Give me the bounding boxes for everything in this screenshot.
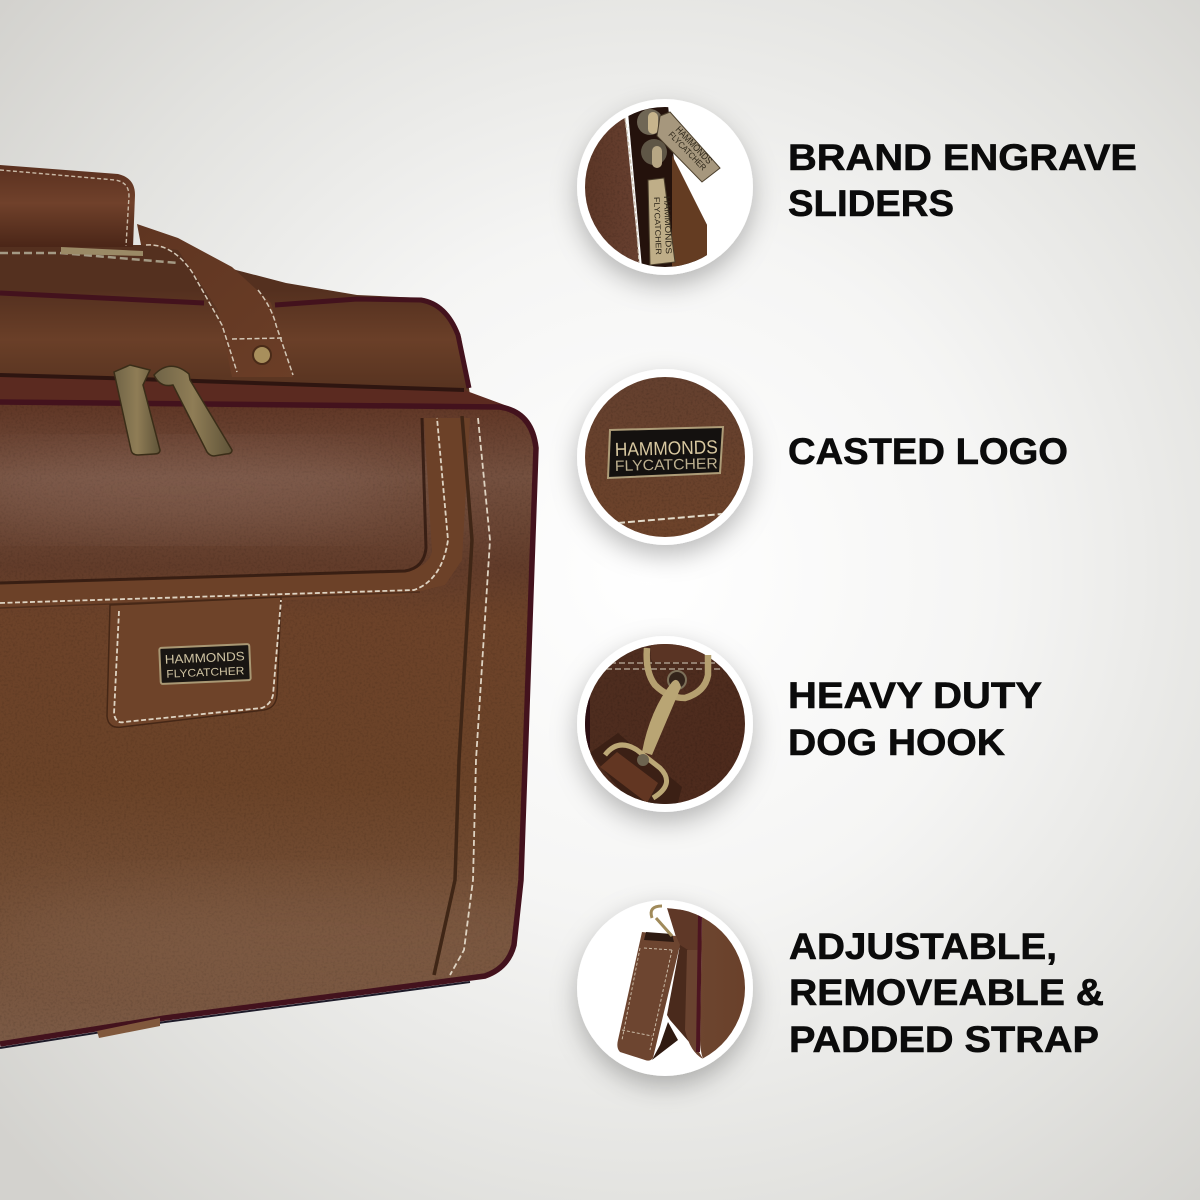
slider tag: top: FLYCATCHER	[667, 129, 708, 172]
logo badge plate: FLYCATCHER	[615, 455, 718, 475]
feature: brand engrave sliders	[577, 99, 1137, 275]
label: brand engrave sliders: BRAND ENGRAVE	[788, 136, 1137, 178]
circle: logo badge	[577, 369, 753, 545]
bottom tab	[97, 1018, 160, 1038]
label: casted logo: CASTED LOGO	[788, 430, 1068, 472]
casted logo on bag	[159, 644, 251, 684]
front panel	[0, 405, 534, 1042]
label: brand engrave sliders	[788, 136, 1137, 224]
circle: dog hook	[577, 636, 753, 812]
circle: strap side view	[577, 900, 753, 1076]
slider tag: bottom: FLYCATCHER	[652, 197, 663, 255]
logo badge plate	[608, 427, 723, 478]
casted logo on bag: HAMMONDS	[164, 649, 245, 667]
logo patch	[107, 597, 281, 727]
label: brand engrave sliders: SLIDERS	[788, 182, 954, 224]
logo badge plate: HAMMONDS	[615, 437, 718, 461]
label: adjustable padded strap	[789, 925, 1104, 1060]
feature: heavy duty dog hook	[577, 636, 1042, 812]
feature: casted logo	[577, 369, 1068, 545]
slider tag: top: HAMMONDS	[673, 124, 714, 167]
label: adjustable padded strap: PADDED STRAP	[789, 1018, 1099, 1060]
label: heavy duty dog hook: DOG HOOK	[788, 721, 1005, 763]
zipper band	[0, 375, 510, 407]
label: adjustable padded strap: REMOVEABLE &	[789, 971, 1104, 1013]
carry handle strap	[137, 224, 293, 377]
slider tag: top	[657, 112, 720, 182]
label: adjustable padded strap: ADJUSTABLE,	[789, 925, 1057, 967]
edge piping	[0, 402, 536, 1048]
slider tag: bottom: HAMMONDS	[662, 196, 674, 254]
metal zip slider on top	[61, 247, 143, 256]
casted logo on bag: FLYCATCHER	[166, 665, 245, 681]
label: heavy duty dog hook	[788, 674, 1042, 763]
upper body panel	[0, 245, 470, 395]
side gusset seam and stitching	[434, 416, 490, 975]
front zip pullers	[114, 365, 232, 456]
handle flap	[0, 165, 135, 247]
label: heavy duty dog hook: HEAVY DUTY	[788, 674, 1042, 716]
rivet	[253, 346, 271, 364]
circle: zipper sliders	[577, 99, 753, 275]
brown leather bag	[0, 165, 539, 1049]
pocket opening and lip	[0, 418, 470, 610]
feature: adjustable padded strap	[577, 900, 1104, 1076]
brass D-ring and hook	[605, 648, 708, 798]
folded padded strap	[617, 906, 680, 1061]
slider tag: bottom	[648, 178, 675, 265]
